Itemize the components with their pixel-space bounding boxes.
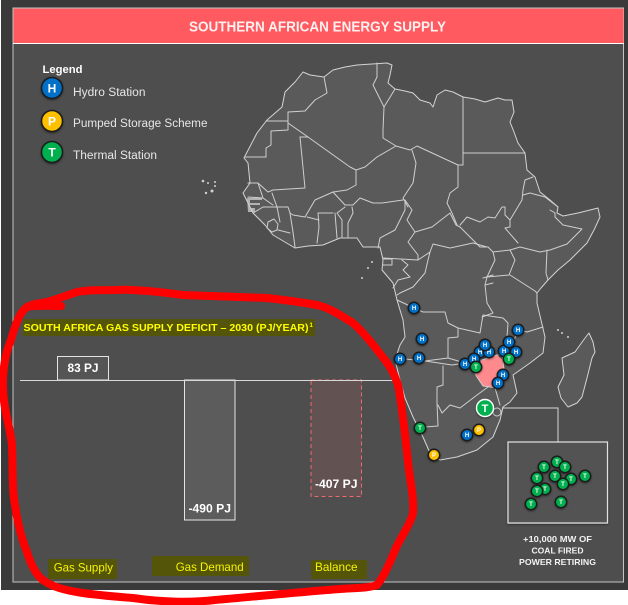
header banner: [13, 8, 624, 44]
bar: gas demand: -490 PJ: [188, 504, 231, 516]
legend item: hydro: H: [48, 82, 56, 96]
map station markers: H: [465, 433, 469, 439]
legend item: hydro: [42, 78, 146, 99]
legend item: thermal: [42, 142, 157, 162]
legend item: hydro: Hydro Station: [73, 87, 146, 99]
category label: balance: [311, 560, 367, 579]
bar: gas supply: [58, 356, 108, 380]
inset panel: coal stations: T: [563, 465, 567, 471]
chart title: [23, 319, 315, 336]
legend: [42, 64, 208, 162]
inset panel: coal stations: T: [535, 476, 539, 482]
map station markers: H: [483, 343, 487, 349]
legend heading: Legend: [42, 64, 82, 76]
bar: balance: [311, 380, 362, 496]
category label: gas supply: Gas Supply: [54, 560, 113, 574]
inset panel: coal stations: T: [583, 474, 587, 480]
map station markers: H: [412, 306, 416, 312]
map station markers: T: [507, 357, 511, 363]
legend item: pumped storage: P: [48, 114, 56, 128]
map station markers: T: [418, 426, 422, 432]
map station markers: P: [432, 453, 436, 459]
category label: gas demand: [152, 556, 249, 576]
category label: balance: Balance: [315, 560, 358, 574]
bar: balance: -407 PJ: [315, 479, 358, 491]
map station markers: H: [417, 356, 421, 362]
islands: small dots: [202, 180, 569, 338]
inset caption: POWER RETIRING: [519, 557, 596, 567]
inset panel: coal stations: T: [569, 477, 573, 483]
map station markers: P: [477, 428, 481, 434]
map of Africa: [202, 63, 600, 460]
inset panel: coal stations: T: [559, 500, 563, 506]
bar chart: [20, 356, 393, 520]
chart title: SOUTH AFRICA GAS SUPPLY DEFICIT – 2030 (PJ/YEAR): [24, 323, 308, 334]
inset panel: coal stations: [508, 442, 608, 523]
legend item: thermal: Thermal Station: [73, 150, 157, 162]
category label: gas demand: Gas Demand: [176, 560, 244, 574]
inset caption: +10,000 MW OF: [523, 534, 592, 544]
red hand-drawn annotation loop: [3, 290, 413, 602]
map station markers: H: [487, 350, 491, 356]
map station markers: T: [474, 365, 478, 371]
map station markers: H: [516, 328, 520, 334]
legend item: thermal: T: [48, 146, 56, 160]
inset panel: coal stations: T: [543, 487, 547, 493]
map station markers: H: [501, 373, 505, 379]
island: Madagascar: [558, 333, 595, 407]
map station markers: H: [398, 357, 402, 363]
title: SOUTHERN AFRICAN ENERGY SUPPLY: [189, 20, 446, 36]
inset panel: coal stations: T: [555, 460, 559, 466]
map station markers: H: [502, 349, 506, 355]
map station markers: H: [472, 357, 476, 363]
inset caption: COAL FIRED: [532, 546, 584, 556]
chart title: 1: [310, 323, 314, 329]
inset caption: [519, 534, 596, 567]
inset panel: coal stations: T: [542, 465, 546, 471]
inset panel: coal stations: T: [535, 489, 539, 495]
large thermal marker: T: [482, 403, 489, 415]
large thermal marker: [476, 400, 494, 416]
inset panel: coal stations: T: [553, 474, 557, 480]
map station markers: H: [514, 350, 518, 356]
category label: gas supply: [48, 559, 117, 579]
bar: gas supply: 83 PJ: [68, 363, 98, 375]
map station markers: H: [496, 381, 500, 387]
inset connector: [502, 408, 558, 442]
inset panel: coal stations: T: [529, 502, 533, 508]
country: Zimbabwe highlight: [472, 355, 504, 388]
inset panel: coal stations: T: [561, 482, 565, 488]
map station markers: H: [420, 337, 424, 343]
legend item: pumped storage: Pumped Storage Scheme: [73, 118, 208, 130]
map station markers: H: [463, 362, 467, 368]
bar: gas demand: [184, 380, 235, 520]
legend item: pumped storage: [42, 110, 208, 132]
map station markers: H: [478, 350, 482, 356]
map station markers: [394, 302, 524, 461]
map station markers: H: [507, 340, 511, 346]
